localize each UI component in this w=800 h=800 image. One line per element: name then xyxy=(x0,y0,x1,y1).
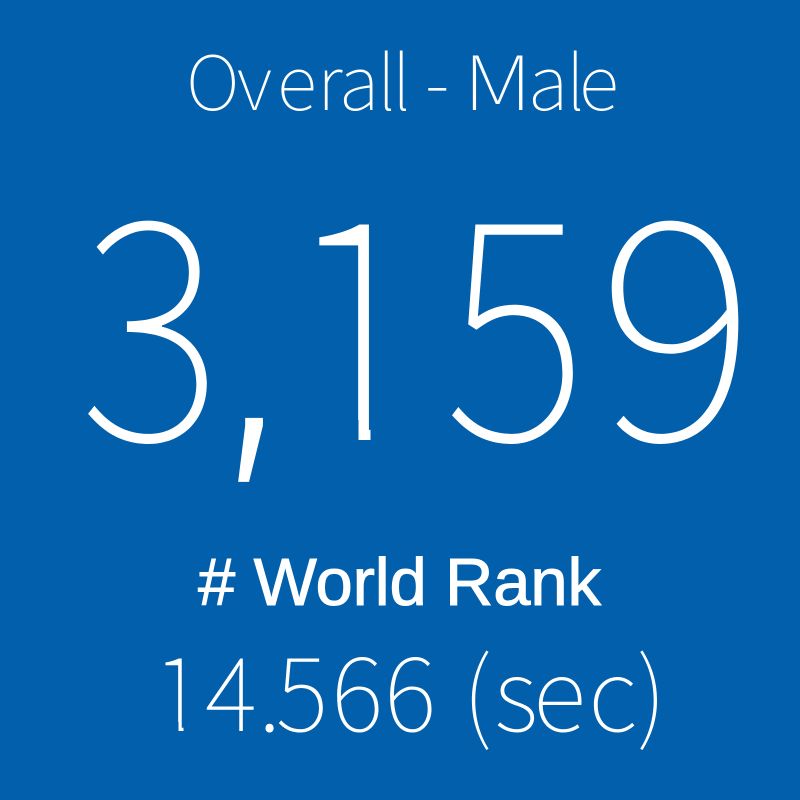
big number xyxy=(79,85,756,529)
title: - xyxy=(425,23,449,132)
big number: 1 xyxy=(278,86,437,529)
time value: (sec) xyxy=(462,615,667,760)
big number: 9 xyxy=(597,86,756,529)
big number: 5 xyxy=(444,85,587,528)
time value: 14.566 xyxy=(152,615,436,760)
time value xyxy=(150,615,667,760)
title: ale xyxy=(528,23,619,132)
big number: , xyxy=(197,106,311,525)
title xyxy=(186,23,619,132)
title: M xyxy=(463,23,532,132)
label: world rank: # World Rank xyxy=(198,545,602,620)
title: Overall xyxy=(186,23,411,132)
big number: 3 xyxy=(79,85,222,528)
